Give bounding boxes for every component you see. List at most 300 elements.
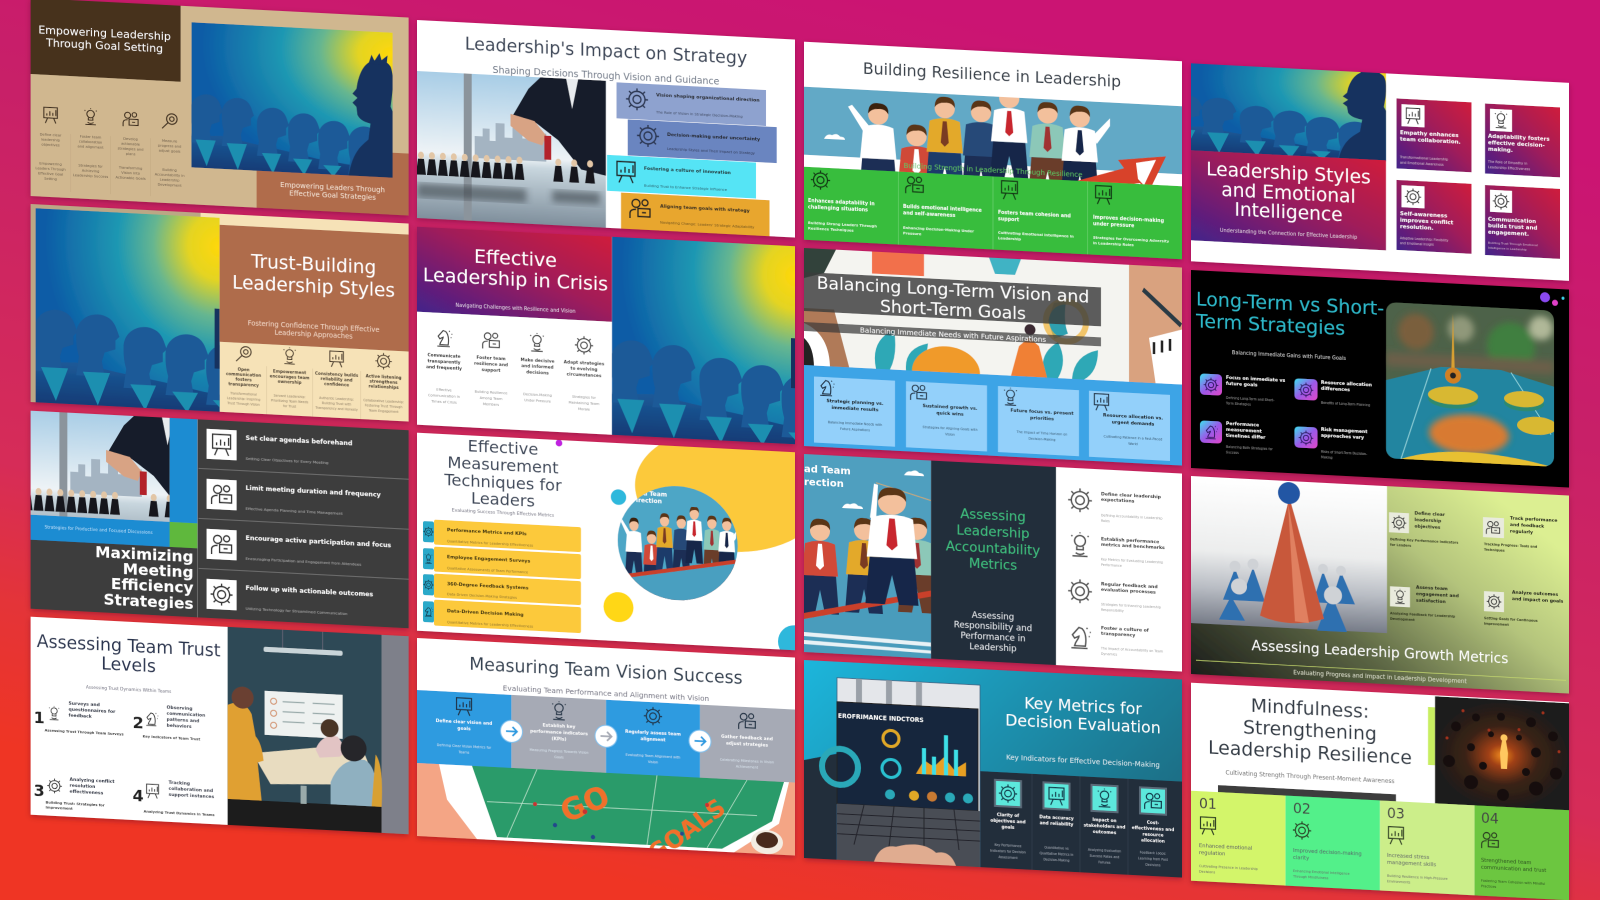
title box: Empowering Leadership	[38, 23, 171, 43]
gradient crowd image	[612, 236, 795, 444]
icons	[437, 328, 593, 355]
box: alignment: Navigating Change: Leaders' Strategic Adaptability	[660, 221, 755, 229]
slide: Long-Term vs Short-Term Strategies	[1191, 270, 1569, 488]
box: vision: The Role of Vision in Strategic Decision-Making	[655, 110, 743, 119]
metric rows: Performance Metrics and KPIs	[447, 527, 527, 537]
card: communication: Building Trust Through Emotional	[1488, 241, 1538, 247]
green benefit columns	[804, 167, 1182, 259]
indicator columns: Feedback Loops:	[1140, 850, 1166, 856]
card: adaptability: making.	[1488, 147, 1513, 154]
growth metric items: Track performance	[1510, 515, 1557, 524]
metric rows: Data-Driven Decision-Making Strategies	[447, 592, 517, 600]
bottom right caption box: Empowering Leaders Through	[280, 181, 385, 194]
step band: Evaluating Team Alignment with	[626, 753, 680, 760]
box: innovation	[607, 155, 756, 199]
slide: Assessing Leadership Accountability Metrics	[801, 454, 1182, 672]
growth metric items: Analyze outcomes	[1512, 590, 1558, 598]
four benefit columns: 01	[1199, 796, 1217, 813]
four style columns: Servant Leadership:	[274, 394, 306, 399]
icons	[236, 345, 392, 370]
dark title panel	[931, 461, 1056, 665]
four goal columns: Define clear	[40, 132, 62, 138]
step band: Measuring Progress Towards Vision	[529, 748, 589, 755]
title band: Balancing Long-Term Vision and	[817, 274, 1089, 308]
title band	[804, 272, 1101, 328]
slide: Trust-Building Leadership Styles	[22, 204, 409, 424]
strategy items: Defining Long-Term and Short-	[1226, 396, 1274, 402]
green benefit columns: Building Strong Leaders Through	[808, 221, 877, 228]
numbered items: effectiveness	[70, 789, 104, 796]
blue caption panel	[31, 411, 198, 548]
four goal columns: Develop	[123, 137, 139, 142]
four crisis columns: Times of Crisis	[430, 399, 457, 405]
gradient crowd image	[36, 208, 220, 412]
step band: (KPIs)	[552, 736, 566, 743]
slide: Leadership's Impact on Strategy	[416, 20, 795, 238]
numbered items: Tracking	[169, 780, 190, 787]
four crisis columns: Under Pressure	[524, 398, 551, 404]
numbered items: 2	[133, 713, 144, 733]
four crisis columns: Strategies for	[572, 395, 596, 400]
step band: performance indicators	[530, 728, 588, 737]
four crisis columns: decisions	[526, 369, 549, 377]
team illustration band	[804, 76, 1182, 231]
four goal columns: Leadership	[160, 178, 180, 183]
dark title panel: Metrics	[969, 557, 1017, 574]
accent strip	[1428, 707, 1435, 765]
slide: Key Metrics for Decision Evaluation	[804, 660, 1182, 878]
box: innovation: Building Trust to Enhance Strategic Influence	[644, 184, 728, 192]
card: self-awareness: Adaptive Leadership: Flexibility	[1400, 236, 1449, 243]
subtitle band	[804, 322, 1101, 347]
agenda rows: Limit meeting duration and frequency	[246, 485, 381, 499]
green benefit columns: under pressure	[1093, 221, 1135, 229]
laptop dashboard photo: EROFRIMANCE INDCTORS	[838, 713, 924, 724]
goals illustration: GOALS	[642, 793, 731, 868]
blue card section: priorities	[1030, 415, 1054, 422]
four benefit columns: management skills	[1387, 860, 1436, 868]
metric rows: Quantitative Metrics for Leadership Effectiveness	[447, 539, 533, 548]
green benefit columns: Enhancing Decision-Making Under	[903, 226, 974, 233]
title box: Leadership Approaches	[274, 329, 353, 341]
icon row	[44, 106, 177, 130]
four benefit columns: Decisions	[1199, 870, 1215, 874]
numbered items: Analyzing Trust Dynamics in Teams	[144, 810, 215, 817]
metric rows: Quantitative Metrics for Leadership Effectiveness	[447, 620, 533, 629]
four benefit columns: 03	[1387, 806, 1405, 823]
four crisis columns: Foster team	[476, 355, 506, 362]
step band: alignment	[640, 736, 666, 743]
title box: Leadership Styles	[232, 272, 395, 302]
four goal columns: collaboration	[79, 139, 102, 145]
title: Measurement	[447, 453, 559, 477]
green benefit columns: Pressure	[903, 231, 922, 236]
agenda rows: Utilizing Technology for Streamlined Communication	[246, 606, 348, 616]
title: Techniques for	[443, 470, 562, 495]
strategy items: approaches vary	[1321, 433, 1364, 441]
four benefit columns: Enhanced emotional	[1199, 843, 1252, 852]
four style columns: Consistency builds	[315, 371, 359, 378]
title: Long-Term vs Short-	[1196, 288, 1384, 320]
step band: goals	[457, 726, 471, 732]
indicator columns: resource	[1142, 831, 1164, 839]
team circle image	[618, 486, 738, 600]
card: communication: builds trust and	[1488, 223, 1537, 232]
card: self-awareness	[1396, 180, 1472, 254]
numbered items	[34, 698, 215, 818]
four style columns: Open	[238, 367, 250, 372]
strategy items: measurement	[1226, 427, 1263, 435]
four style columns: communication	[226, 371, 261, 378]
goals illustration	[417, 763, 795, 875]
strategy items	[1200, 373, 1372, 462]
metrics list: Establish performance	[1101, 536, 1159, 545]
four crisis columns: and informed	[521, 363, 554, 371]
metrics list: evaluation processes	[1101, 587, 1156, 596]
numbered items: 3	[34, 781, 45, 800]
growth metric items: Setting Goals for Continuous	[1484, 616, 1538, 623]
four crisis columns: Maintaining Team	[569, 401, 600, 406]
four crisis columns: Morale	[578, 407, 590, 412]
numbered items: patterns and	[167, 717, 199, 724]
indicator columns: Assessment	[998, 855, 1018, 860]
green benefit columns: support	[998, 216, 1020, 223]
title panel: Understanding the Connection for Effective Leadership	[1220, 228, 1357, 241]
four goal columns: Accountability in	[155, 172, 185, 178]
cartoon team image	[801, 454, 936, 659]
card: self-awareness: Self-awareness	[1400, 211, 1448, 220]
dark title panel: Assessing	[960, 507, 1026, 525]
metrics list: Responsibility	[1101, 608, 1124, 613]
growth metric items: objectives	[1414, 524, 1441, 531]
card: adaptability: Leadership Effectiveness	[1488, 165, 1530, 171]
metrics list: Define clear leadership	[1101, 491, 1162, 500]
growth metric items: Assess team	[1416, 585, 1448, 592]
indicator columns: Analyzing Evaluation	[1088, 848, 1121, 853]
agenda rows	[199, 428, 409, 619]
card: empathy: Transformational Leadership	[1399, 155, 1448, 162]
four goal columns: Building	[162, 168, 177, 173]
blue card section: Strategies for Aligning Goals with	[922, 425, 978, 432]
indicator columns: Learning from Past	[1138, 856, 1169, 862]
four style columns: transparency	[228, 381, 259, 388]
growth metric items: satisfaction	[1416, 598, 1446, 605]
strategy items: timelines differ	[1226, 433, 1266, 441]
four goal columns: Foster team	[80, 135, 102, 140]
subtitle: Evaluating Progress and Impact in Leadership Development	[1293, 670, 1467, 685]
metrics list: Roles	[1101, 519, 1110, 523]
step band: Gather feedback and	[721, 734, 773, 742]
box: alignment: Aligning team goals with strategy	[660, 204, 750, 214]
blue card section: Resource allocation vs.	[1103, 412, 1163, 422]
four goal columns: Vision into	[121, 171, 140, 176]
agenda rows: Setting Clear Objectives for Every Meeting	[246, 456, 329, 465]
four crisis columns: Effective	[436, 388, 452, 392]
growth metric items: Define clear	[1414, 511, 1446, 518]
blue card section: Balancing Immediate Needs with	[828, 420, 882, 427]
four benefit columns: Enhancing Emotional Intelligence	[1293, 869, 1350, 876]
blue card section: urgent demands	[1112, 419, 1155, 428]
card: self-awareness: and Emotional Insight	[1400, 241, 1435, 247]
four style columns: Trust Through Vision	[226, 401, 260, 407]
metrics list: Dynamics	[1101, 652, 1118, 657]
indicator columns: Indicators for Decision	[990, 849, 1026, 854]
strategy items: Making	[1321, 455, 1332, 460]
indicator columns: Key Performance	[995, 843, 1022, 848]
title panel	[417, 227, 612, 322]
card: adaptability: effective decision-	[1488, 140, 1545, 149]
slide: Effective Leadership in Crisis	[414, 226, 798, 448]
four goal columns: Measure	[162, 139, 178, 144]
strategy items: Performance	[1226, 421, 1259, 429]
goals illustration: GO	[555, 779, 615, 830]
indicator columns	[990, 772, 1174, 877]
agenda rows: Follow up with actionable outcomes	[246, 585, 373, 598]
agenda rows: Effective Agenda Planning and Time Management	[246, 506, 343, 516]
growth metric items: leadership	[1414, 517, 1442, 524]
title: Assessing Leadership Growth Metrics	[1252, 638, 1508, 667]
card: communication: Communication	[1488, 217, 1536, 225]
slide: Balancing Long-Term Vision and Short-Term Goals	[804, 248, 1182, 466]
indicator columns: Decisions	[1145, 863, 1161, 867]
agenda rows: Set clear agendas beforehand	[246, 435, 352, 447]
indicator columns: Decision-Making	[1043, 857, 1070, 863]
title panel: Effective	[474, 246, 557, 272]
four goal columns: Setting	[44, 177, 57, 181]
metrics list: Performance	[1101, 563, 1122, 568]
blue card section: Cultivating Patience in a Fast-Paced	[1104, 434, 1162, 442]
title: Building Resilience in Leadership	[863, 59, 1121, 91]
four style columns: for Trust	[283, 404, 297, 409]
indicator columns: objectives and	[990, 818, 1026, 825]
strategy items: Term Strategies	[1225, 401, 1251, 407]
title box: Fostering Confidence Through Effective	[248, 319, 380, 334]
title panel: Intelligence	[1234, 200, 1343, 226]
blue card section: quick wins	[936, 410, 964, 418]
strategy items: Success	[1226, 450, 1239, 455]
four benefit columns: clarity	[1293, 855, 1309, 862]
dark title panel: Assessing	[972, 611, 1014, 623]
blue card section: The Impact of Time Horizon on	[1016, 430, 1067, 437]
title box: Through Goal Setting	[45, 36, 163, 55]
meeting room illustration	[228, 627, 409, 834]
blue card section: Strategic planning vs.	[826, 398, 884, 407]
card: empathy	[1396, 98, 1472, 172]
metrics list: The Impact of Accountability on Team	[1100, 646, 1163, 654]
step band: Vision	[648, 760, 658, 764]
indicator columns: and reliability	[1040, 820, 1074, 828]
strategy items: future goals	[1226, 381, 1258, 388]
green benefit columns: Enhances adaptability in	[808, 198, 875, 207]
four crisis columns: circumstances	[567, 371, 602, 379]
blue card section: World	[1128, 442, 1138, 446]
numbered items: 4	[133, 786, 144, 806]
dark title panel: Responsibility and	[954, 620, 1032, 634]
box: decision-making: Leadership Styles and Their Impact on Strategy	[667, 147, 756, 156]
desk illustration	[804, 248, 1182, 388]
numbered items: Key Indicators of Team Trust	[143, 734, 201, 741]
title box: Trust-Building	[250, 251, 376, 279]
slide: Empowering Leadership Through Goal Setting	[31, 0, 409, 216]
cone and pawns photo	[1191, 476, 1387, 634]
box: decision-making	[628, 119, 777, 163]
box: vision	[616, 82, 766, 126]
title panel	[1191, 150, 1386, 250]
leader image	[1158, 55, 1392, 163]
title panel: and Emotional	[1221, 180, 1356, 208]
green benefit columns: challenging situations	[808, 204, 868, 214]
strategy items: Resource allocation	[1321, 380, 1372, 388]
strategy items: Risks of Short-Term Decision-	[1321, 450, 1367, 456]
title: Measuring Team Vision Success	[469, 655, 743, 689]
laptop dashboard photo	[822, 677, 980, 867]
numbered items: collaboration and	[169, 786, 213, 794]
green benefit columns: Fosters team cohesion and	[998, 210, 1071, 220]
indicator columns: Data accuracy	[1039, 814, 1074, 822]
green benefit columns: Strategies for Overcoming Adversity	[1093, 236, 1170, 244]
four goal columns: leadership	[41, 138, 61, 143]
four crisis columns: Decision-Making	[523, 392, 552, 398]
indicator columns: effectiveness and	[1132, 825, 1174, 833]
indicator columns: goals	[1002, 824, 1015, 831]
four benefit columns: Building Resilience in High-Pressure	[1387, 874, 1448, 881]
step band: adjust strategies	[726, 740, 768, 749]
crowd around glow image	[1435, 696, 1569, 810]
slide: Assessing Team Trust Levels	[31, 617, 409, 834]
four goal columns	[35, 132, 185, 198]
four crisis columns: Communicate	[427, 352, 461, 360]
indicator columns: Clarity of	[997, 812, 1019, 819]
title panel: Navigating Challenges with Resilience and Vision	[456, 303, 575, 315]
green benefit columns: Resilience Techniques	[808, 226, 854, 233]
four style columns: Fostering Trust Through	[365, 403, 402, 409]
strategy items: Balancing Both Strategies for	[1226, 445, 1273, 451]
decorative yellow blob	[634, 445, 795, 552]
indicator columns: Failures	[1098, 860, 1111, 865]
title: Meeting	[123, 560, 194, 582]
four crisis columns: support	[482, 367, 500, 374]
green benefit columns: and self-awareness	[903, 210, 956, 219]
growth metric items: and impact on goals	[1512, 596, 1564, 605]
slide: Measuring Team Vision Success	[417, 638, 795, 875]
four crisis columns: transparently	[427, 358, 461, 366]
four crisis columns: Among Team	[480, 396, 503, 401]
four style columns: Authentic Leadership:	[319, 396, 354, 402]
blurred board photo	[1386, 302, 1557, 467]
title band: Short-Term Goals	[880, 297, 1026, 324]
four style columns: strengthens	[370, 379, 398, 385]
four benefit columns: communication and trust	[1481, 865, 1546, 874]
numbered items: questionnaires for	[69, 707, 116, 715]
metric rows: Qualitative Assessments of Team Performance	[447, 566, 528, 574]
title	[37, 632, 221, 698]
four goal columns: actionable	[121, 142, 141, 147]
subtitle: Key Indicators for Effective Decision-Making	[1006, 753, 1160, 769]
slide: Assessing Leadership Growth Metrics	[1191, 476, 1569, 694]
metrics list	[1068, 488, 1165, 659]
step band: Define clear vision and	[436, 718, 492, 727]
dark indicator panel	[980, 771, 1182, 878]
title: Term Strategies	[1195, 310, 1345, 340]
subtitle: Balancing Immediate Gains with Future Goals	[1232, 350, 1346, 362]
four goal columns: Leaders Through	[35, 166, 66, 172]
card: self-awareness: improves conflict	[1400, 218, 1454, 226]
four style columns: Collaborative Leadership:	[363, 398, 404, 404]
four crisis columns: Adapt strategies	[564, 359, 605, 367]
boardroom chess photo	[30, 410, 170, 522]
green benefit columns: Leadership	[998, 236, 1021, 241]
four goal columns: Strategies for	[78, 163, 103, 169]
slide: Leadership Styles and Emotional Intelligence	[1158, 55, 1569, 281]
title: Assessing Team Trust	[37, 632, 221, 662]
numbered items: communication	[167, 711, 205, 719]
green benefit columns: Improves decision-making	[1093, 215, 1165, 224]
four goal columns: Empowering	[39, 161, 62, 167]
subtitle: Evaluating Team Performance and Alignment with Vision	[503, 683, 709, 703]
four benefit columns: 02	[1293, 801, 1311, 818]
numbered items: Observing	[167, 705, 192, 712]
slide: Maximizing Meeting Efficiency Strategies	[12, 408, 409, 628]
card: self-awareness: resolution.	[1400, 224, 1434, 232]
slide: Building Resilience in Leadership	[804, 42, 1182, 259]
four style columns: Building Trust with	[322, 401, 351, 407]
growth metric items	[1389, 509, 1564, 630]
four benefit columns: Strengthened team	[1481, 858, 1531, 866]
bottom right caption box: Effective Goal Strategies	[289, 189, 376, 202]
step band	[417, 690, 795, 783]
indicator columns: allocation	[1141, 837, 1165, 845]
indicator columns: Qualitative Metrics in	[1040, 851, 1073, 857]
growth metric items: engagement and	[1416, 591, 1459, 599]
decorative circles	[555, 440, 795, 650]
metrics list: transparency	[1101, 631, 1135, 639]
cartoon team image: ad Team	[804, 464, 851, 477]
team circle image: ad Team	[639, 490, 667, 499]
indicator columns: Success Rates and	[1090, 854, 1119, 859]
team circle image: irection	[636, 497, 662, 505]
step band: Regularly assess team	[625, 729, 681, 738]
numbered items: Assessing Trust Through Team Surveys	[45, 728, 124, 737]
growth metric items: and feedback	[1510, 522, 1545, 530]
four benefit columns: Through Mindfulness	[1292, 874, 1329, 880]
four benefit columns: Cultivating Presence in Leadership	[1199, 864, 1258, 871]
four goal columns: objectives	[41, 143, 60, 148]
agenda rows: Encouraging Participation and Engagement from Attendees	[246, 556, 361, 567]
four crisis columns: to evolving	[570, 366, 598, 373]
step band: Celebrating Milestones in Vision	[720, 758, 774, 764]
numbered items: Surveys and	[69, 701, 100, 708]
indicator columns: Impact on	[1092, 817, 1117, 824]
card: communication	[1485, 185, 1560, 259]
chess photo	[417, 71, 606, 228]
card: empathy: team collaboration.	[1400, 137, 1461, 146]
four benefit columns: 04	[1481, 811, 1499, 828]
growth metric items: Techniques	[1484, 548, 1505, 553]
subtitle band: Balancing Immediate Needs with Future Aspirations	[860, 325, 1046, 344]
four crisis columns: Make decisive	[520, 357, 555, 365]
title: Key Metrics for	[1024, 693, 1142, 718]
title box	[220, 225, 409, 352]
indicator columns: stakeholders and	[1084, 822, 1125, 831]
four benefit columns: Fostering Team Cohesion with Mindful	[1481, 879, 1545, 886]
slide: Mindfulness: Strengthening Leadership Resilience	[1191, 683, 1569, 900]
growth metric items: Tracking Progress: Tools and	[1484, 542, 1538, 549]
dark title panel: Leadership	[969, 642, 1017, 654]
strategy items: differences	[1321, 386, 1350, 393]
four style columns: reliability and	[321, 376, 353, 383]
title box	[31, 0, 181, 82]
blue card section: Decision-Making	[1028, 437, 1056, 442]
